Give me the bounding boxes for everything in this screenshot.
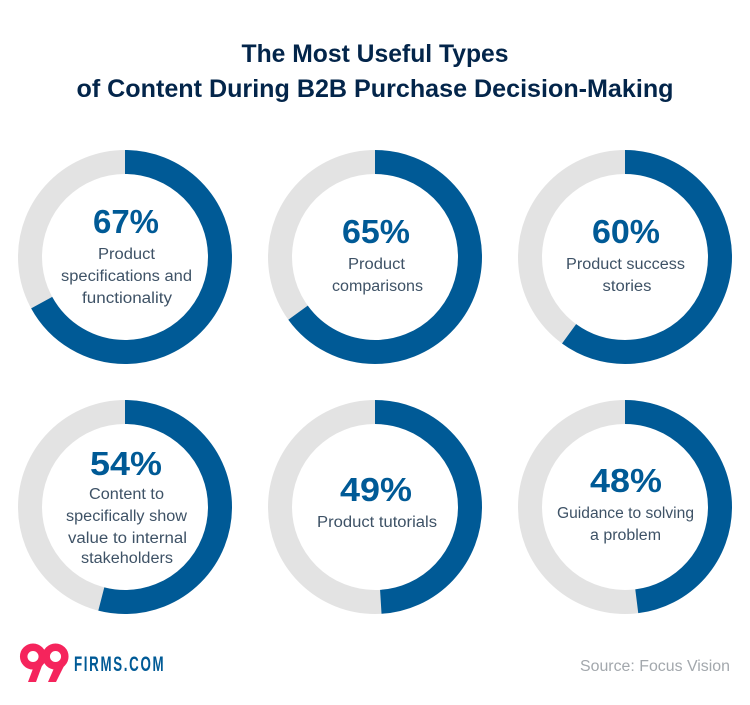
- donut: 60% product success stories: [530, 162, 720, 352]
- donut: 49% product tutorials: 49%: [340, 471, 412, 508]
- title: of Content During B2B Purchase Decision-Making: [76, 75, 674, 103]
- donut: 54% value to internal stakeholders: stakeholders: [81, 550, 173, 567]
- title: The Most Useful Types: [242, 40, 508, 68]
- donut: 54% value to internal stakeholders: Content to: [89, 486, 164, 503]
- donut: 54% value to internal stakeholders: specifically show: [66, 508, 188, 525]
- logo wordmark: FIRMS.COM: [74, 652, 165, 676]
- title: [76, 40, 674, 103]
- donut: 48% guidance to solving a problem: [530, 412, 720, 602]
- donut: 48% guidance to solving a problem: Guidance to solving: [557, 505, 694, 522]
- donut: 67% product specifications: functionality: [82, 290, 172, 307]
- donut: 67% product specifications: [30, 162, 220, 352]
- donut: 49% product tutorials: [280, 412, 470, 602]
- donut: 54% value to internal stakeholders: value to internal: [68, 530, 187, 547]
- donut: 65% product comparisons: [280, 162, 470, 352]
- donut: 67% product specifications: 67%: [93, 203, 159, 240]
- donut: 60% product success stories: Product success: [566, 256, 685, 273]
- donut: 67% product specifications: Product: [98, 246, 156, 263]
- donut: 65% product comparisons: 65%: [342, 213, 410, 250]
- logo: 99firms.com: [24, 647, 165, 682]
- donut: 54% value to internal stakeholders: 54%: [90, 445, 162, 482]
- donut: 65% product comparisons: comparisons: [332, 278, 423, 295]
- donut: 48% guidance to solving a problem: 48%: [590, 462, 662, 499]
- donut: 67% product specifications: specifications and: [61, 268, 192, 285]
- donut: 48% guidance to solving a problem: a problem: [590, 527, 661, 544]
- donut: 65% product comparisons: Product: [348, 256, 406, 273]
- icon: 99 mark: [24, 647, 68, 682]
- donut: 54% value to internal stakeholders: [30, 412, 220, 602]
- donut: 60% product success stories: stories: [602, 278, 652, 295]
- source note: Source: Focus Vision: [580, 658, 730, 675]
- donut: 60% product success stories: 60%: [592, 213, 660, 250]
- donut: 49% product tutorials: Product tutorials: [317, 514, 437, 531]
